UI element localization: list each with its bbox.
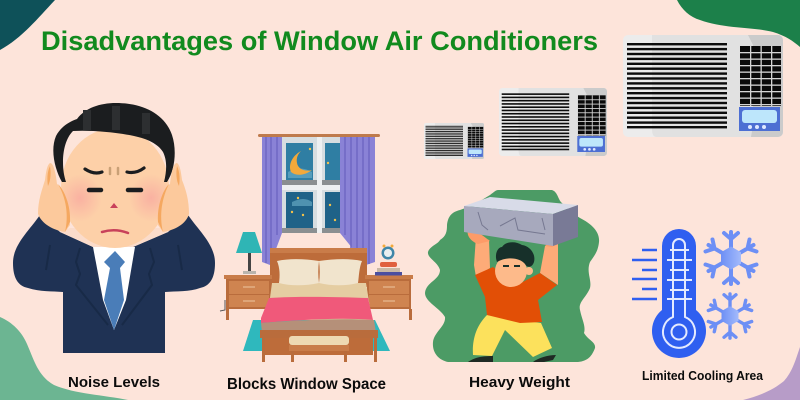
- small snowflake: [708, 294, 752, 338]
- left hand: [38, 163, 70, 232]
- trousers: [473, 315, 552, 357]
- hair: [53, 103, 175, 182]
- collar and shirt: [93, 247, 135, 330]
- illustration: bedroom: [220, 134, 413, 362]
- headboard: [270, 248, 367, 287]
- shirt: [475, 267, 557, 323]
- head: [495, 255, 527, 287]
- head: [61, 128, 169, 248]
- corner blob: bottom left: [0, 317, 128, 400]
- arms: [474, 236, 558, 285]
- tie: [104, 251, 125, 330]
- bench: [289, 336, 349, 362]
- scale ticks: [667, 250, 692, 299]
- eyebrows: [85, 168, 144, 173]
- cheeks: [58, 174, 102, 222]
- right nightstand: [365, 275, 413, 320]
- title: Disadvantages of Window Air Conditioners: [41, 26, 598, 56]
- icon: small air conditioner: [424, 123, 484, 159]
- closed eyes: [89, 188, 141, 192]
- illustration: man covering ears: [13, 103, 215, 353]
- ear: [525, 267, 533, 275]
- pillows: [277, 259, 362, 285]
- hair: [496, 242, 534, 267]
- corner blob: top left: [0, 0, 55, 50]
- label: heavy weight: Heavy Weight: [469, 374, 570, 391]
- block: [464, 197, 578, 246]
- bed frame: [260, 330, 378, 362]
- corner blob: bottom right: [743, 347, 800, 400]
- left nightstand: [224, 275, 272, 320]
- label: blocks window space: Blocks Window Space: [227, 376, 386, 393]
- icon: medium air conditioner: [499, 88, 607, 156]
- thermometer outline: [663, 239, 695, 348]
- speed lines: [632, 250, 657, 299]
- label: noise levels: Noise Levels: [68, 374, 160, 391]
- curtains: [262, 137, 375, 265]
- green blob: [425, 190, 599, 362]
- face: [503, 265, 520, 267]
- thermometer body: [652, 229, 706, 358]
- shoes: [468, 355, 556, 362]
- suit: [13, 215, 215, 353]
- illustration: person lifting heavy block: [425, 190, 599, 362]
- large snowflake: [706, 232, 756, 284]
- lamp: [236, 232, 262, 274]
- curtain rod: [258, 134, 380, 137]
- corner blob: top right: [677, 0, 800, 47]
- pink blanket: [261, 297, 373, 323]
- right hand: [158, 163, 189, 232]
- moon: [290, 151, 312, 175]
- window: [282, 137, 345, 233]
- icon: large air conditioner: [623, 35, 783, 137]
- mattress: [267, 283, 372, 320]
- power plug: [220, 300, 225, 311]
- icon: thermometer and snowflakes: [632, 229, 756, 358]
- hands: [468, 229, 569, 247]
- label: limited cooling area: Limited Cooling Area: [642, 369, 764, 383]
- rug: [243, 320, 390, 351]
- mouth: [102, 230, 128, 233]
- alarm clock and books: [375, 244, 402, 276]
- frown lines: [110, 168, 118, 174]
- nose: [110, 203, 118, 208]
